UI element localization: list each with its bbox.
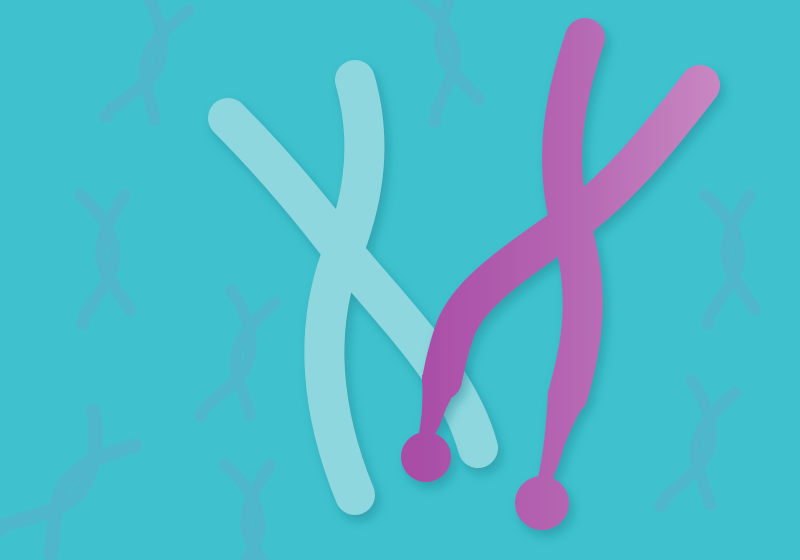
light chromosome: [228, 80, 478, 495]
neck right: [538, 390, 588, 480]
pink chromosome: [401, 38, 700, 530]
neck left: [418, 375, 458, 438]
